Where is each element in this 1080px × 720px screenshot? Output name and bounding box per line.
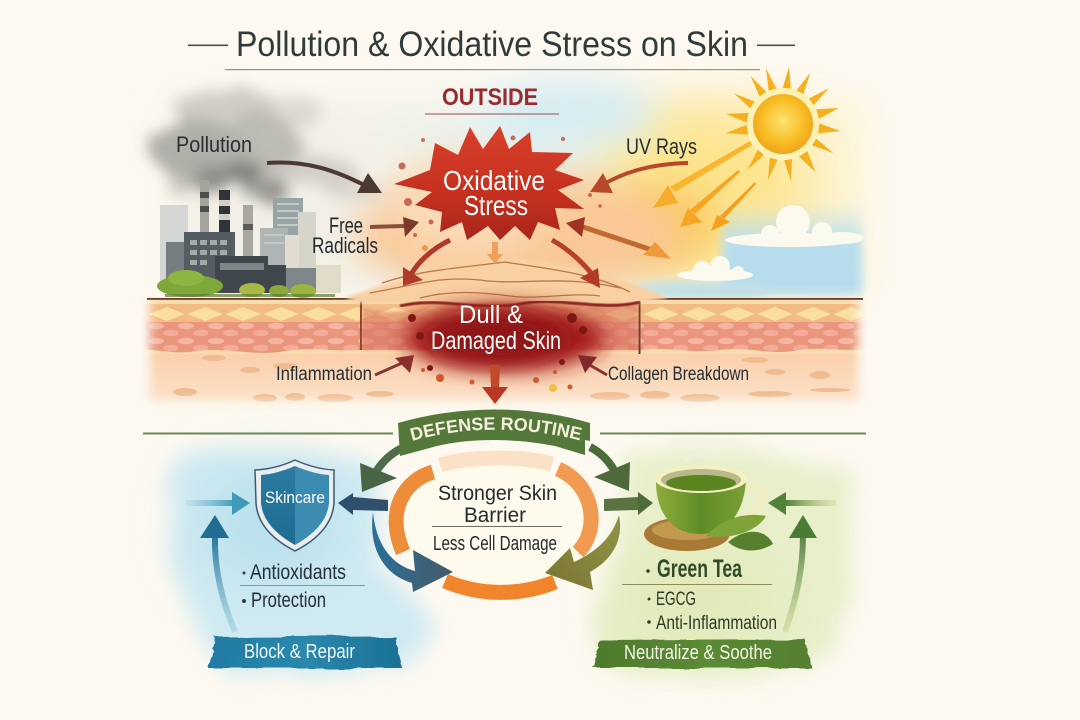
panel: oxidative stress burst: Stress — [464, 190, 528, 221]
smoke clouds — [152, 86, 378, 203]
icon: factory city — [160, 180, 341, 293]
label: outside: OUTSIDE — [442, 84, 538, 111]
arrow: up green from neutralize and soothe — [785, 515, 817, 632]
banner: defense routine — [398, 410, 590, 456]
text: barrier benefits: Barrier — [464, 504, 526, 527]
panel: blue skincare wash — [170, 450, 435, 676]
arrow: collagen — [578, 355, 607, 375]
cracked skin above damage — [345, 258, 668, 303]
arrow: left blue input — [185, 492, 250, 515]
bushes — [157, 270, 335, 298]
panel: damaged skin — [362, 301, 640, 392]
ring: stronger skin barrier — [396, 458, 592, 593]
title: Pollution & Oxidative Stress on Skin — [236, 25, 748, 64]
arrow: double stress and UV — [566, 217, 671, 259]
panel: oxidative stress burst: Oxidative — [443, 165, 545, 196]
arrow: ring to tea — [604, 492, 653, 515]
arrow: stress to skin right — [552, 240, 600, 288]
arrow: banner to skincare — [360, 448, 402, 492]
icon: shield skincare: Skincare — [265, 488, 325, 507]
skin cross-section — [142, 298, 866, 406]
panel: oxidative stress burst — [394, 126, 602, 251]
arrow: skincare to ring — [372, 512, 453, 592]
banner: defense routine: DEFENSE ROUTINE — [410, 417, 582, 441]
panel: outside scene sky — [175, 82, 865, 300]
list: green tea benefits: EGCG — [656, 589, 696, 610]
arrow: stress to skin center — [487, 242, 503, 264]
text: barrier benefits: Less Cell Damage — [433, 533, 557, 555]
divider lines — [143, 432, 866, 434]
arrow: free radicals — [370, 217, 419, 237]
arrow: ring to shield — [338, 493, 388, 515]
banner: neutralize and soothe: Neutralize & Soothe — [624, 642, 772, 664]
label: free radicals — [312, 213, 378, 258]
arrow: stress to skin left — [403, 240, 450, 286]
arrow: pollution to stress — [267, 162, 382, 193]
panel: damaged skin: Dull & — [459, 301, 523, 329]
label: free radicals: Radicals — [312, 233, 378, 258]
list: green tea benefits: Green Tea — [657, 555, 743, 583]
text: barrier benefits: Stronger Skin — [438, 482, 557, 505]
list: skincare benefits — [240, 561, 365, 612]
arrow: tea to ring — [545, 515, 620, 590]
list: green tea benefits — [622, 555, 777, 634]
list: skincare benefits: Protection — [251, 589, 326, 612]
label: pollution: Pollution — [176, 132, 252, 157]
icon: green tea cup — [644, 452, 773, 551]
arrow: banner to green tea — [590, 447, 630, 491]
arrow: right green input — [768, 492, 836, 515]
label: free radicals: Free — [329, 213, 363, 238]
arrow: UV to stress — [590, 163, 688, 193]
label: collagen breakdown: Collagen Breakdown — [608, 364, 749, 385]
icon: shield skincare — [255, 460, 334, 551]
label: inflammation: Inflammation — [276, 364, 372, 385]
arrow: up blue from block and repair — [200, 515, 235, 632]
list: green tea benefits: Anti-Inflammation — [656, 613, 777, 634]
arrows: UV beams — [653, 141, 756, 231]
banner: block and repair: Block & Repair — [244, 641, 355, 663]
panel: green tea wash — [591, 450, 855, 676]
arrow: damage to defense — [482, 365, 508, 404]
list: skincare benefits: Antioxidants — [250, 561, 346, 584]
arrow: inflammation — [375, 355, 414, 375]
label: UV rays: UV Rays — [626, 134, 697, 159]
clouds — [677, 205, 864, 281]
text: barrier benefits — [432, 482, 562, 555]
icon: sun — [725, 66, 841, 182]
banner: neutralize and soothe — [593, 639, 812, 668]
banner: block and repair — [208, 636, 402, 668]
panel: damaged skin: Damaged Skin — [431, 327, 561, 355]
